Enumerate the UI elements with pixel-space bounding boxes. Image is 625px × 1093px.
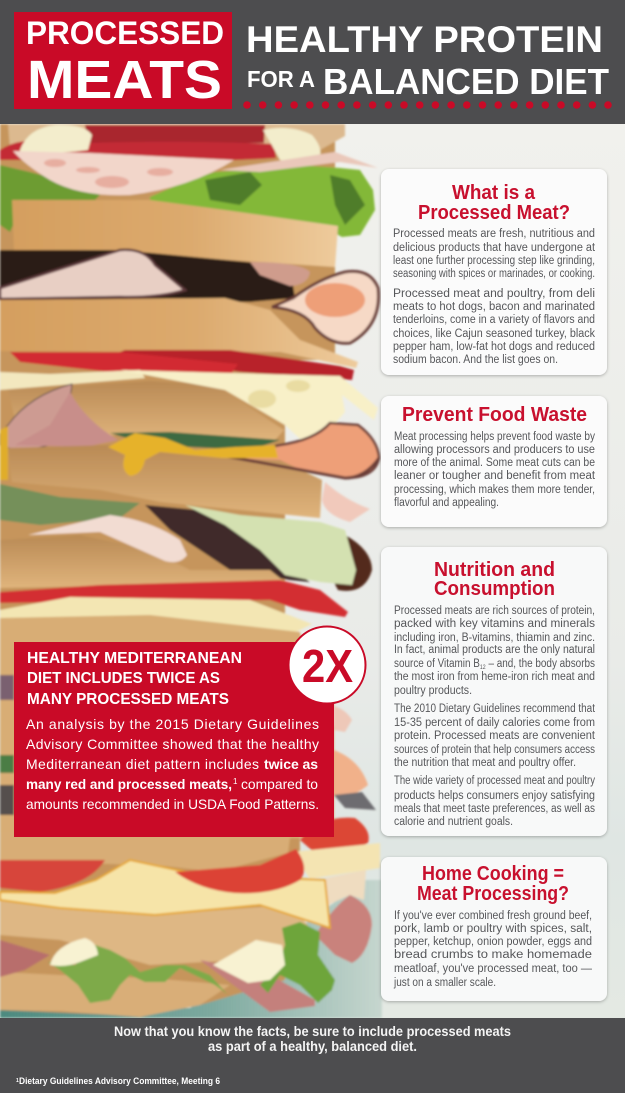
bread lower [0, 832, 290, 872]
heading [418, 182, 570, 224]
heading: Meat Processing? [417, 883, 569, 905]
body text: sodium bacon. And the list goes on. [393, 354, 558, 366]
panel: home cooking [381, 857, 607, 1001]
pale lettuce [185, 505, 356, 585]
callout body: twice as [264, 756, 318, 772]
heading: Home Cooking = [422, 863, 564, 885]
body text: choices, like Cajun seasoned turkey, black [393, 328, 595, 340]
ham spots [44, 159, 173, 188]
main title: HEALTHY PROTEIN [246, 19, 603, 60]
yellow cheese [0, 860, 330, 928]
body text: Processed meats are fresh, nutritious and [393, 228, 595, 240]
red pepper middle [120, 350, 354, 380]
swiss cheese left [0, 370, 145, 390]
roast beef fold [15, 392, 118, 447]
body text: The 2010 Dietary Guidelines recommend that [394, 703, 596, 715]
sandwich photo illustration [0, 124, 382, 1018]
callout heading: HEALTHY MEDITERRANEAN [27, 650, 242, 667]
mustard left [0, 426, 8, 480]
body text: products helps consumers enjoy satisfying [394, 790, 595, 802]
right hams beside panel [330, 705, 352, 732]
salami right [315, 895, 372, 963]
body text: allowing processors and producers to use [394, 444, 595, 456]
body text: packed with key vitamins and minerals [394, 618, 595, 630]
bottom bread [0, 972, 230, 1017]
swiss cheese slice [120, 370, 378, 450]
callout body: compared to [241, 776, 318, 792]
body text: least one further processing step like grinding, [393, 255, 595, 267]
body text: tenderloins, come in a variety of flavors and [393, 314, 595, 326]
mustard [108, 433, 278, 476]
callout: mediterranean diet [14, 626, 366, 837]
back bread [326, 870, 366, 905]
footnote: 1 [16, 1078, 19, 1084]
body text: delicious products that have undergone at [393, 242, 596, 254]
salami lower [200, 960, 315, 1012]
body text: meals that meet taste preferences, as well as [394, 803, 595, 815]
body text [394, 605, 596, 828]
body text: bread crumbs to make homemade [394, 949, 592, 961]
dark lettuce left [0, 484, 140, 525]
body text: the most iron from heme-iron rich meat and [394, 671, 595, 683]
bottom left lettuce [48, 945, 235, 1003]
heading: Processed Meat? [418, 202, 570, 224]
processed meats badge: MEATS [27, 50, 222, 110]
left lettuce [0, 165, 100, 232]
closing message: as part of a healthy, balanced diet. [208, 1038, 417, 1054]
heading: Nutrition and [434, 559, 555, 581]
body text: In fact, animal products are the only natural [394, 644, 595, 656]
folded ham right [272, 271, 378, 343]
body text: Meat processing helps prevent food waste by [394, 431, 595, 443]
body text: meatloaf, you've processed meat, too — [394, 963, 592, 975]
body text: 12 [480, 665, 486, 671]
top bread [8, 124, 345, 150]
callout body [26, 716, 319, 812]
bread slice two [0, 298, 358, 368]
processed meats badge: PROCESSED [26, 15, 224, 51]
processed meats badge [14, 12, 232, 110]
left edge filling [0, 675, 14, 815]
back cheese [292, 843, 380, 879]
main title: BALANCED DIET [323, 61, 609, 102]
folded ham middle [28, 515, 187, 562]
table mat [0, 880, 382, 1018]
ham with orange centre [334, 750, 368, 796]
footnote: Dietary Guidelines Advisory Committee, Meeting 6 [19, 1076, 220, 1087]
closing message [114, 1023, 511, 1054]
bottom right lettuce [260, 922, 335, 1003]
purple filling [145, 505, 310, 582]
panel: nutrition and consumption [381, 547, 607, 836]
main title [246, 19, 609, 102]
right lettuce [150, 165, 375, 237]
body text: the nutrition that meat and poultry offer. [394, 757, 576, 769]
header band [0, 0, 625, 124]
body text: source of Vitamin B [394, 658, 494, 670]
body text: protein. Processed meats are convenient [394, 730, 596, 742]
roast beef left [0, 384, 72, 452]
dotted rule [243, 101, 612, 109]
body text: pepper ham, low-fat hot dogs and reduced [393, 341, 595, 353]
bread behind red panel [0, 615, 334, 838]
cheese layers [0, 597, 312, 632]
callout body: An analysis by the 2015 Dietary Guidelines [26, 716, 319, 732]
body text: – and, the body absorbs [486, 658, 595, 670]
callout heading: DIET INCLUDES TWICE AS [27, 670, 220, 687]
callout body: Advisory Committee showed that the healthy [26, 736, 319, 752]
heading: Consumption [434, 578, 555, 600]
body text: leaner or tougher and benefit from meat [394, 470, 596, 482]
ham slice top [13, 151, 234, 195]
right lettuce shadows [205, 172, 365, 225]
tomato left [0, 860, 105, 892]
bread slice five [0, 535, 285, 588]
dark sausage [330, 535, 372, 591]
callout body: 1 [233, 777, 238, 786]
bread seven [0, 900, 312, 965]
callout body: Mediterranean diet pattern includes [26, 756, 259, 772]
green leaf under [110, 432, 280, 450]
callout body: amounts recommended in USDA Food Patterns. [26, 796, 319, 812]
callout heading [27, 650, 242, 708]
body text: pork, lamb or poultry with spices, salt, [394, 923, 592, 935]
heading [434, 559, 555, 600]
body text: Processed meats are rich sources of protein, [394, 605, 595, 617]
panel: what is a processed meat [381, 169, 607, 375]
callout heading: MANY PROCESSED MEATS [27, 691, 229, 708]
footer band [0, 1018, 625, 1093]
body text: If you've ever combined fresh ground beef, [394, 910, 592, 922]
body text: flavorful and appealing. [394, 497, 499, 509]
folded ham left [0, 250, 185, 299]
body text: just on a smaller scale. [393, 977, 496, 989]
sandwich underlay [0, 124, 335, 1016]
body text [394, 431, 596, 509]
tomato centre [175, 849, 304, 893]
pink meat [250, 262, 310, 286]
heading: What is a [452, 182, 536, 204]
bread slice one [12, 200, 338, 267]
ham centre [305, 283, 365, 317]
body text: 15-35 percent of daily calories come from [394, 717, 595, 729]
mat weave [0, 880, 382, 1018]
ham back right [220, 152, 378, 172]
dark strip beside panel [334, 792, 376, 810]
bread slice four [8, 445, 322, 518]
ham right two [225, 423, 379, 478]
tomato back [300, 818, 369, 853]
mayonnaise top [20, 125, 320, 163]
heading: Prevent Food Waste [402, 404, 587, 426]
body text: processing, which makes them more tender, [394, 484, 595, 496]
bread slice three [8, 381, 284, 440]
body text: pepper, ketchup, onion powder, eggs and [394, 936, 592, 948]
main title: FOR A [247, 66, 315, 92]
panel: prevent food waste [381, 396, 607, 527]
body text: sources of protein that help consumers access [394, 744, 595, 756]
red pepper lower [0, 580, 348, 617]
body text [393, 228, 596, 366]
top red peppers [0, 125, 276, 162]
salami left [0, 940, 50, 977]
pale ham background [322, 482, 370, 522]
body text: Processed meat and poultry, from deli [393, 288, 595, 300]
body text: meats to hot dogs, bacon and marinated [393, 301, 595, 313]
cheese holes [248, 380, 310, 408]
closing message: Now that you know the facts, be sure to include processed meats [114, 1023, 511, 1039]
callout body: many red and processed meats, [26, 776, 232, 792]
body text [393, 910, 592, 989]
body text: calorie and nutrient goals. [394, 816, 513, 828]
2X badge: 2X [302, 640, 353, 692]
mayonnaise bottom [50, 938, 285, 983]
body text: poultry products. [394, 685, 472, 697]
red pepper front [10, 352, 238, 373]
2X badge [288, 626, 366, 704]
dark filling one [0, 250, 295, 302]
heading [417, 863, 569, 905]
ham ribbon [225, 456, 379, 478]
body text: including iron, B-vitamins, thiamin and zinc. [394, 632, 595, 644]
body text: more of the animal. Some meat cuts can be [394, 457, 595, 469]
